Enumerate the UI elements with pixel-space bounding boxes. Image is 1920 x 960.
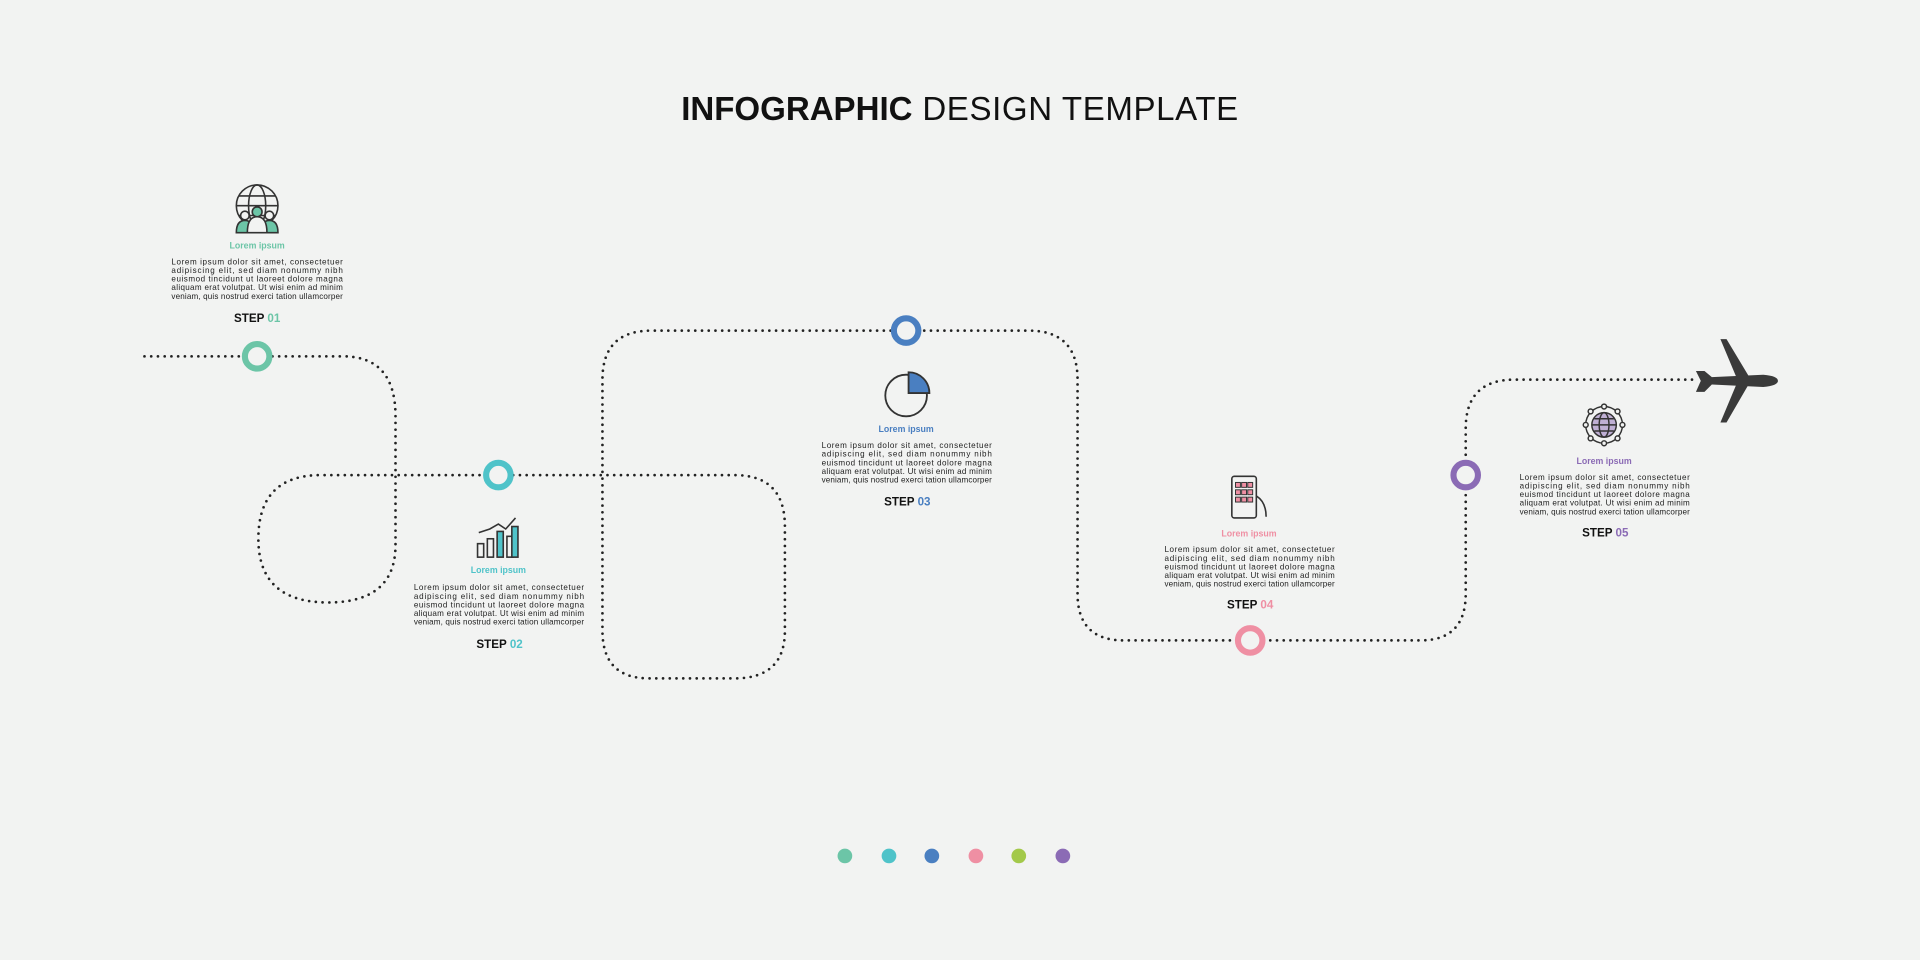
text block: adipiscing elit, sed diam nonummy nibh xyxy=(822,450,992,459)
icon: bar chart xyxy=(478,518,518,557)
step 01 block xyxy=(171,185,343,325)
step 03 block xyxy=(822,372,992,509)
text block: aliquam erat volutpat. Ut wisi enim ad minim xyxy=(1164,571,1335,580)
text block xyxy=(1520,473,1690,516)
text block xyxy=(171,257,343,301)
step label: STEP 02 xyxy=(476,638,523,651)
text block: euismod tincidunt ut laoreet dolore magna xyxy=(1164,562,1335,571)
step label: STEP 01 xyxy=(234,312,281,325)
heading: Lorem ipsum xyxy=(1221,528,1277,538)
color legend dots xyxy=(838,849,1070,863)
marker: step 05 xyxy=(1453,463,1478,487)
title: INFOGRAPHIC DESIGN TEMPLATE xyxy=(681,91,1239,128)
text block: aliquam erat volutpat. Ut wisi enim ad minim xyxy=(1520,499,1690,508)
text block: euismod tincidunt ut laoreet dolore magna xyxy=(1520,490,1690,499)
text block: veniam, quis nostrud exerci tation ullamcorper xyxy=(1164,580,1335,589)
text block xyxy=(414,583,585,626)
text block: euismod tincidunt ut laoreet dolore magna xyxy=(414,600,585,609)
text block: Lorem ipsum dolor sit amet, consectetuer xyxy=(822,441,992,450)
text block: veniam, quis nostrud exerci tation ullamcorper xyxy=(822,475,992,484)
marker: step 03 xyxy=(894,318,918,343)
text block: veniam, quis nostrud exerci tation ullamcorper xyxy=(171,292,343,301)
dotted route path xyxy=(144,331,1696,678)
heading: Lorem ipsum xyxy=(471,565,526,575)
icon: globe with people xyxy=(236,185,278,233)
heading: Lorem ipsum xyxy=(879,424,934,434)
text block xyxy=(822,441,992,484)
marker: step 02 xyxy=(486,463,511,487)
text block: adipiscing elit, sed diam nonummy nibh xyxy=(1164,554,1335,563)
icon: phone in hand xyxy=(1232,476,1266,518)
text block: adipiscing elit, sed diam nonummy nibh xyxy=(1520,482,1690,491)
text block: veniam, quis nostrud exerci tation ullamcorper xyxy=(1520,507,1690,516)
text block: Lorem ipsum dolor sit amet, consectetuer xyxy=(414,583,584,592)
text block: aliquam erat volutpat. Ut wisi enim ad minim xyxy=(414,609,584,618)
text block: euismod tincidunt ut laoreet dolore magna xyxy=(822,458,992,467)
text block: aliquam erat volutpat. Ut wisi enim ad minim xyxy=(171,283,343,292)
step 02 block xyxy=(414,518,585,651)
step label: STEP 03 xyxy=(884,496,931,509)
text block: adipiscing elit, sed diam nonummy nibh xyxy=(171,266,343,275)
marker: step 04 xyxy=(1238,628,1262,653)
step label: STEP 04 xyxy=(1227,599,1274,612)
icon: pie chart xyxy=(885,372,929,416)
icon: network globe xyxy=(1583,404,1625,446)
step label: STEP 05 xyxy=(1582,526,1629,539)
text block: Lorem ipsum dolor sit amet, consectetuer xyxy=(1520,473,1690,482)
text block xyxy=(1164,545,1335,589)
text block: euismod tincidunt ut laoreet dolore magna xyxy=(171,275,343,284)
text block: aliquam erat volutpat. Ut wisi enim ad minim xyxy=(822,467,992,476)
heading: Lorem ipsum xyxy=(230,241,285,251)
text block: adipiscing elit, sed diam nonummy nibh xyxy=(414,592,584,601)
text block: Lorem ipsum dolor sit amet, consectetuer xyxy=(171,257,343,266)
marker: step 01 xyxy=(245,344,269,369)
step 04 block xyxy=(1164,476,1335,612)
text block: veniam, quis nostrud exerci tation ullamcorper xyxy=(414,617,584,626)
icon: airplane xyxy=(1696,339,1778,422)
text block: Lorem ipsum dolor sit amet, consectetuer xyxy=(1164,545,1335,554)
step 05 block xyxy=(1520,404,1690,539)
heading: Lorem ipsum xyxy=(1576,456,1632,466)
